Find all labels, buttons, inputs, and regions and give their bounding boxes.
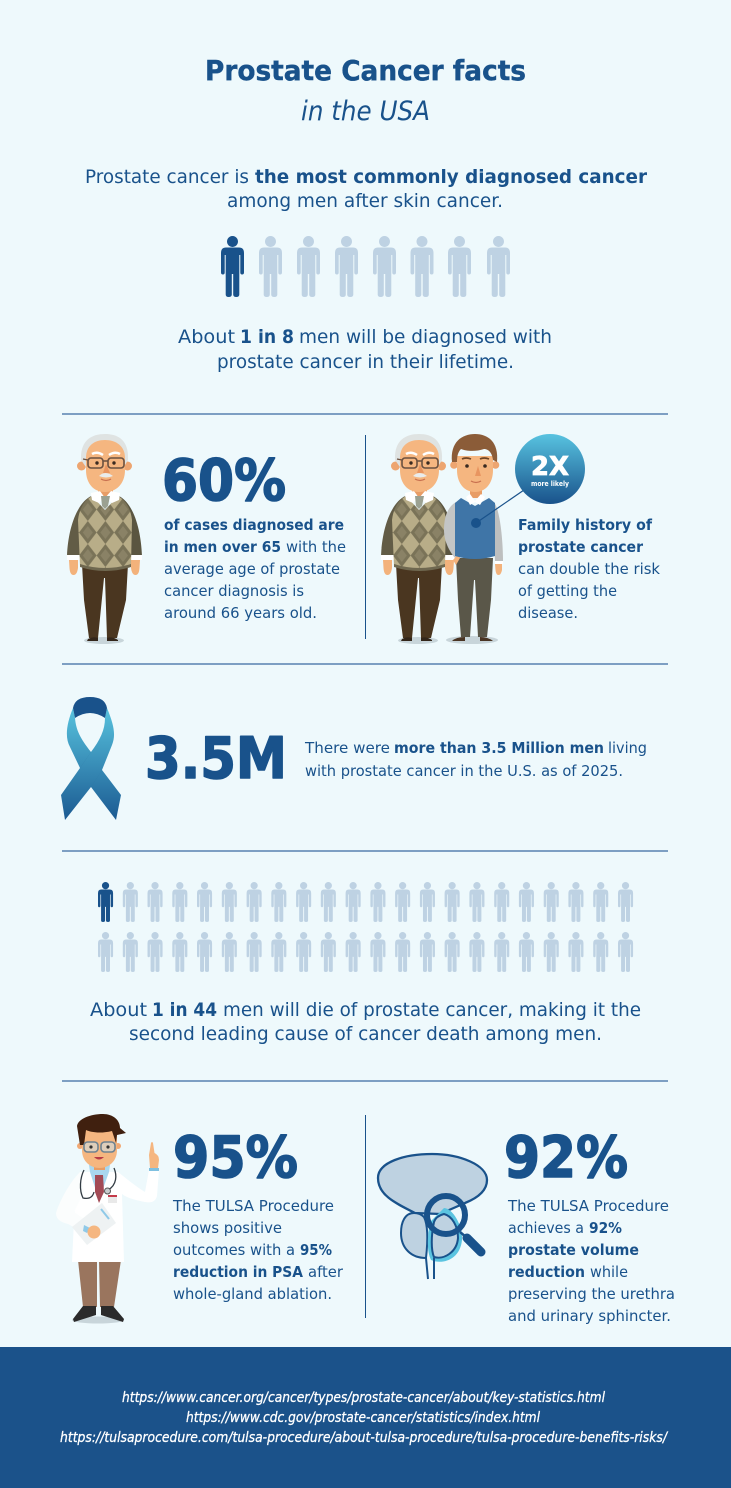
intro text — [85, 167, 648, 212]
stat: 92%: The TULSA Procedure — [507, 1197, 669, 1215]
stat: 3.5M: living — [608, 739, 647, 757]
icon: awareness ribbon — [61, 697, 121, 820]
stat: 95%: shows positive — [173, 1219, 282, 1237]
1 in 44 text — [90, 1000, 641, 1045]
title: in the USA — [301, 96, 430, 127]
pictogram: 1 in 8 men — [221, 236, 510, 297]
stat: 92%: reduction — [508, 1263, 585, 1281]
1 in 8 text — [178, 327, 552, 373]
1 in 8 text: 1 in 8 — [240, 327, 294, 348]
stat: 92%: 92% — [589, 1219, 622, 1237]
intro text: among men after skin cancer. — [227, 191, 503, 212]
stat: 92%: while — [590, 1263, 628, 1281]
stat: 3.5M: more than 3.5 Million men — [394, 739, 604, 757]
family history text: prostate cancer — [518, 538, 643, 556]
stat: 95%: 95% — [173, 1125, 298, 1191]
stat: 60% — [162, 448, 346, 622]
stat: 60%: around 66 years old. — [164, 604, 317, 622]
stat: 3.5M — [145, 726, 647, 792]
stat: 95%: after — [308, 1263, 344, 1281]
stat: 60%: cancer diagnosis is — [164, 582, 304, 600]
1 in 8 text: men will be diagnosed with — [299, 327, 552, 348]
icon: prostate with magnifying glass — [378, 1154, 487, 1279]
stat: 95%: outcomes with a — [173, 1241, 295, 1259]
stat: 95%: 95% — [300, 1241, 332, 1259]
intro text: Prostate cancer is — [85, 167, 249, 188]
stat: 3.5M: There were — [304, 739, 390, 757]
1 in 44 text: second leading cause of cancer death among men. — [129, 1024, 602, 1045]
stat: 92%: achieves a — [508, 1219, 584, 1237]
footer: sources — [0, 1347, 731, 1488]
footer: sources: https://tulsaprocedure.com/tulsa-procedure/about-tulsa-procedure/tulsa-procedure-benefits-risks/ — [60, 1430, 668, 1446]
callout: 2X more likely — [471, 434, 585, 528]
illustration: older man and younger man — [381, 434, 503, 644]
stat: 92%: 92% — [504, 1125, 628, 1191]
stat: 60%: with the — [286, 538, 346, 556]
illustration: doctor — [56, 1114, 159, 1324]
title: Prostate Cancer facts — [205, 55, 526, 87]
stat: 3.5M: 3.5M — [145, 726, 287, 792]
family history text: can double the risk — [518, 560, 660, 578]
family history text: of getting the — [518, 582, 617, 600]
stat: 60%: 60% — [162, 448, 286, 514]
stat: 95%: The TULSA Procedure — [172, 1197, 334, 1215]
footer: sources: https://www.cancer.org/cancer/types/prostate-cancer/about/key-statistics.html — [122, 1390, 605, 1406]
footer: sources: https://www.cdc.gov/prostate-cancer/statistics/index.html — [186, 1410, 540, 1426]
stat: 3.5M: with prostate cancer in the U.S. as of 2025. — [305, 762, 623, 780]
1 in 44 text: men will die of prostate cancer, making it the — [223, 1000, 641, 1021]
family history text: disease. — [518, 604, 578, 622]
stat: 92% — [504, 1125, 675, 1325]
1 in 8 text: About — [178, 327, 235, 348]
family history text: Family history of — [518, 516, 652, 534]
1 in 44 text: 1 in 44 — [152, 1000, 217, 1021]
callout: 2X more likely: more likely — [531, 480, 569, 488]
callout: 2X more likely: 2X — [531, 452, 569, 482]
stat: 92%: and urinary sphincter. — [508, 1307, 671, 1325]
illustration: older man — [67, 434, 142, 644]
stat: 95%: whole-gland ablation. — [173, 1285, 332, 1303]
stat: 95%: reduction in PSA — [173, 1263, 303, 1281]
1 in 44 text: About — [90, 1000, 147, 1021]
stat: 95% — [172, 1125, 344, 1303]
pictogram: 1 in 44 men — [98, 882, 633, 972]
stat: 92%: preserving the urethra — [508, 1285, 675, 1303]
title — [205, 55, 526, 127]
stat: 60%: of cases diagnosed are — [164, 516, 344, 534]
1 in 8 text: prostate cancer in their lifetime. — [217, 352, 514, 373]
intro text: the most commonly diagnosed cancer — [255, 167, 648, 188]
stat: 92%: prostate volume — [508, 1241, 639, 1259]
stat: 60%: average age of prostate — [164, 560, 340, 578]
family history text — [518, 516, 660, 622]
stat: 60%: in men over 65 — [164, 538, 281, 556]
